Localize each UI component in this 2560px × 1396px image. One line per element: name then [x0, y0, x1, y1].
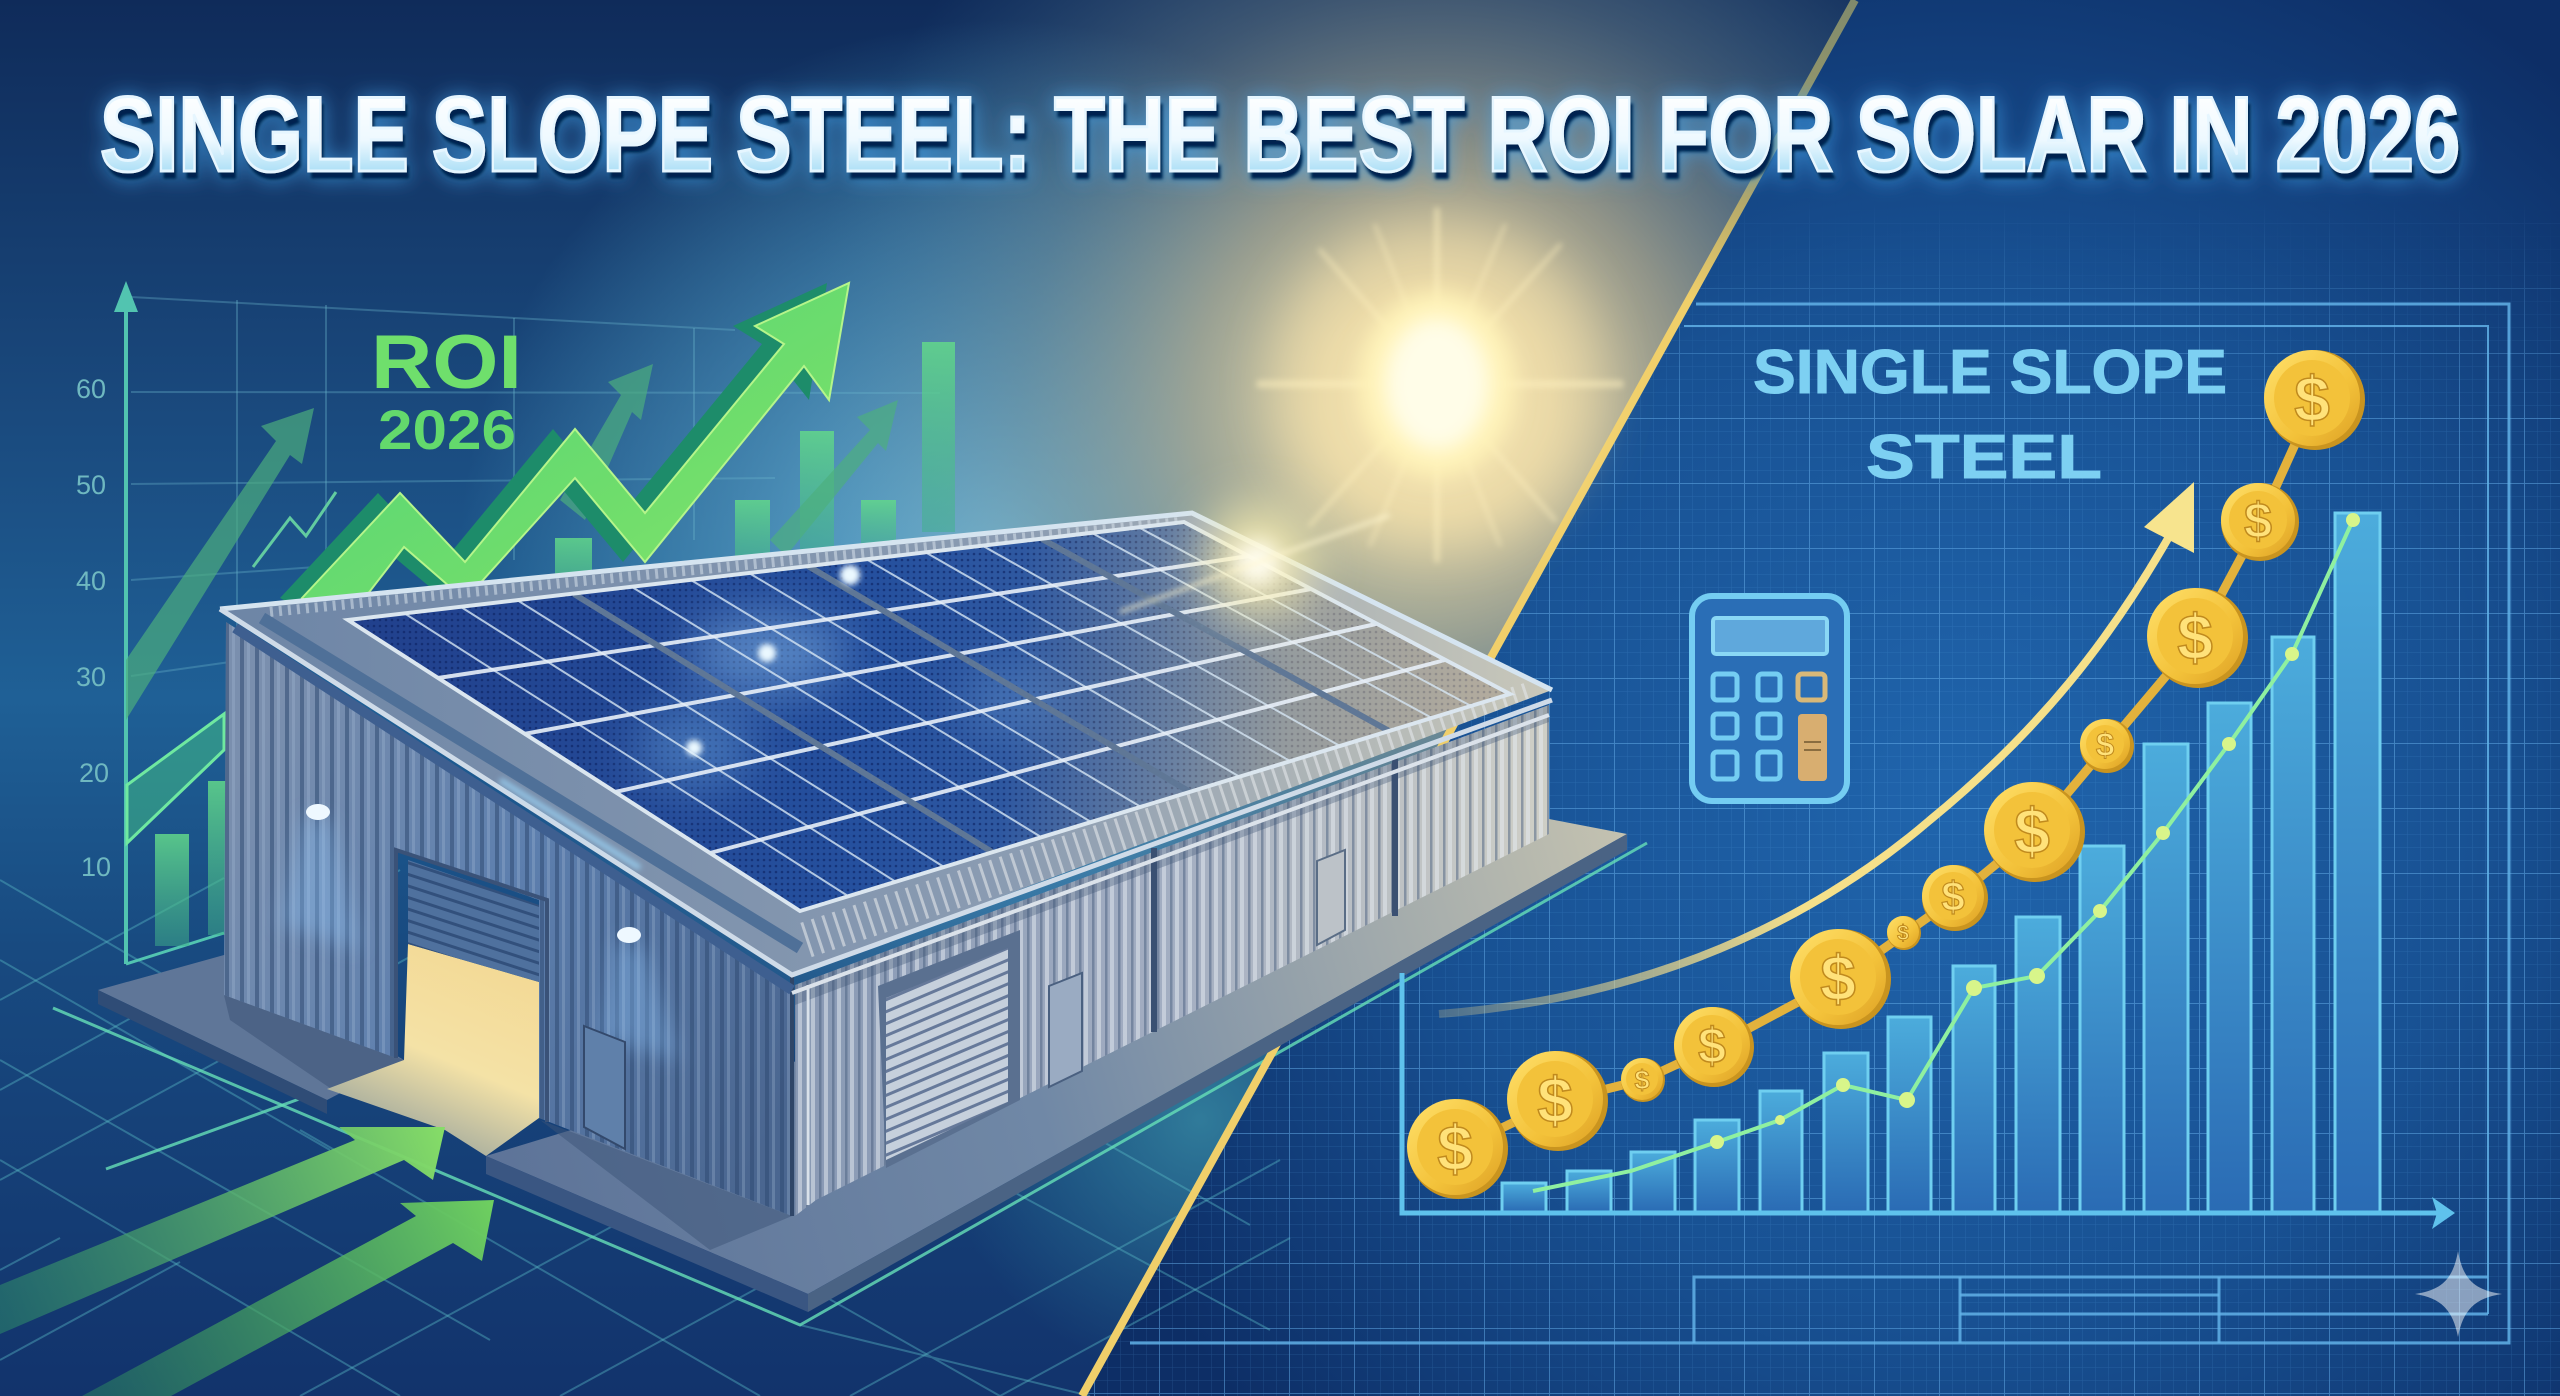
left axis numbers: 20: [79, 758, 109, 788]
gold coin 12: $: [2294, 363, 2330, 435]
gold coin 9: [2080, 719, 2134, 773]
gold coin 7: [1922, 865, 1988, 931]
gold coin 10: $: [2177, 601, 2213, 673]
gold coin 10: [2147, 588, 2248, 688]
label: Single Slope Steel: STEEL: [1866, 423, 2102, 492]
left axis numbers: 50: [76, 470, 106, 500]
building: side doors on right wall: [1049, 850, 1345, 1087]
gold coin 2: [1507, 1051, 1608, 1151]
chart axes: [1402, 973, 2455, 1229]
gold coin 3: $: [1634, 1065, 1650, 1095]
background: left sky and ground: [0, 0, 1855, 1396]
gold coin 7: $: [1941, 873, 1965, 920]
gold coin 1: [1407, 1099, 1508, 1199]
panel sun glare: [686, 508, 1390, 756]
left chart axis: [114, 281, 224, 964]
building: right wall: [792, 705, 1549, 1216]
gold coin 6: $: [1897, 922, 1909, 945]
gold coin 4: $: [1698, 1018, 1726, 1074]
left axis numbers: 10: [81, 852, 111, 882]
label: ROI 2026: ROI: [371, 320, 522, 405]
label: ROI 2026: 2026: [378, 398, 516, 461]
gold coin 5: [1790, 929, 1891, 1029]
blueprint frame: [1130, 304, 2509, 1343]
blueprint title block: [1694, 1277, 2488, 1343]
bar chart: [1402, 513, 2455, 1229]
ground grid lines: [0, 870, 1290, 1396]
main green ROI arrow: [127, 283, 849, 843]
gold coin 8: $: [2014, 795, 2050, 867]
sun: [1260, 210, 1620, 560]
gold coin 9: $: [2096, 726, 2114, 763]
building: roll-up door on right wall: [878, 930, 1020, 1168]
building: solar panels: [348, 522, 1510, 911]
background trend arrows: [126, 364, 898, 720]
left axis numbers: 40: [76, 566, 106, 596]
floor accent lines: [53, 843, 1647, 1325]
label: ROI 2026: [371, 320, 522, 461]
background: right blueprint panel: [1080, 0, 2560, 1396]
calculator icon: [1692, 596, 1847, 801]
building: left wall: [224, 622, 792, 1216]
coin path: [1458, 400, 2315, 1149]
left chart grid: [126, 297, 940, 964]
gold coin 4: [1674, 1007, 1754, 1087]
building: open roll-up door: [396, 850, 547, 1122]
sparkle watermark: [2415, 1251, 2502, 1337]
building: steel roof: [220, 513, 1552, 993]
building: lit doorway floor: [327, 944, 539, 1156]
green chart bars: [155, 342, 955, 946]
gold coin 5: $: [1820, 942, 1856, 1014]
curved yellow arrow: [1439, 482, 2194, 1014]
gold coin 6: [1887, 916, 1921, 950]
gold coin 3: [1621, 1058, 1665, 1102]
building: wall lights: [280, 804, 680, 1060]
gold coin 2: $: [1537, 1064, 1573, 1136]
building: small side door: [584, 1026, 625, 1149]
gold coin 1: $: [1437, 1112, 1473, 1184]
small trend zigzag: [253, 492, 336, 567]
label: Single Slope Steel: SINGLE SLOPE: [1753, 338, 2227, 407]
chart bars: [1502, 513, 2380, 1212]
gold coin 12: [2264, 350, 2365, 450]
gold divider line: [1082, 0, 1855, 1396]
gold coin 11: $: [2244, 493, 2272, 549]
left axis numbers: [76, 374, 111, 882]
green growth line: [1533, 513, 2360, 1191]
green arrows pointing at doorway: [0, 1127, 494, 1396]
building: wall posts: [1151, 758, 1398, 1032]
gold coin 8: [1984, 782, 2085, 882]
building: concrete slab: [98, 819, 1627, 1312]
left axis numbers: 30: [76, 662, 106, 692]
gold coin 11: [2221, 483, 2299, 561]
label: Single Slope Steel: [1753, 338, 2227, 492]
left axis numbers: 60: [76, 374, 106, 404]
